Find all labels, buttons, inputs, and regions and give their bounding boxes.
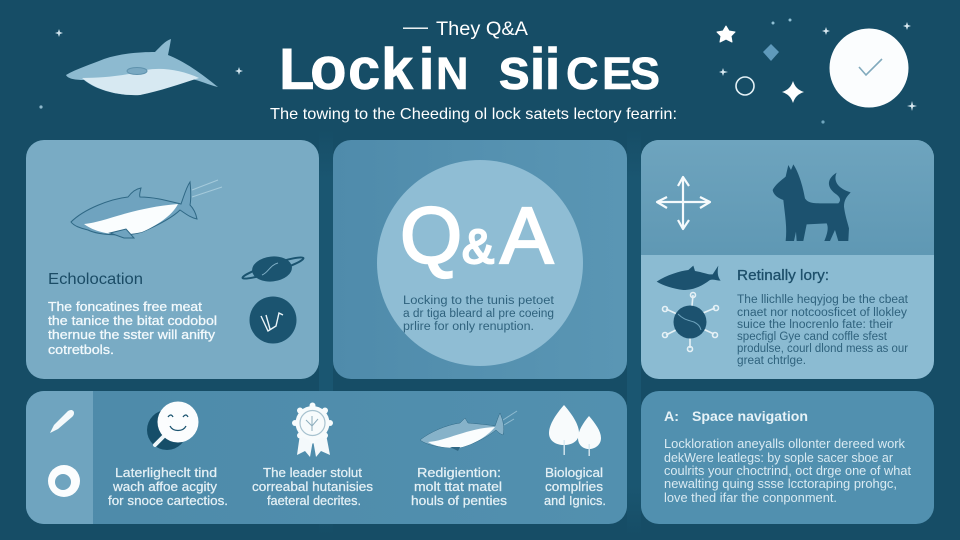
icon: four-way arrows xyxy=(657,177,710,229)
column text 3: molt ttat matel xyxy=(414,479,502,494)
body text: cnaet nor notcoosficet of llokley xyxy=(737,307,907,319)
icon: leaves xyxy=(549,405,601,456)
circle text xyxy=(403,295,555,333)
title: L xyxy=(279,37,314,102)
body text: Lockloration aneyalls ollonter dereed work xyxy=(664,437,906,451)
column text 4 xyxy=(544,465,606,508)
title: i xyxy=(418,37,435,102)
icon: ring xyxy=(48,465,80,497)
column text 2: correabal hutanisies xyxy=(252,479,374,494)
eyebrow: They Q&A xyxy=(403,19,528,40)
circle text: Locking to the tunis petoet xyxy=(403,295,555,307)
column text 3 xyxy=(411,465,508,508)
body text: cotretbols. xyxy=(48,342,114,357)
icon: shark silhouette xyxy=(657,266,721,290)
column text 1: for snoce cartectios. xyxy=(108,493,228,508)
column text 2 xyxy=(252,465,374,508)
column text 1 xyxy=(108,465,228,508)
circle text: a dr tiga bleard al pre coeing xyxy=(403,308,554,320)
column text 1: Laterligheclt tind xyxy=(115,465,217,480)
column text 3: Redigiention: xyxy=(417,465,501,480)
panel: echolocation xyxy=(26,140,319,379)
header right star decorations xyxy=(717,18,917,124)
column text 2: The leader stolut xyxy=(263,465,362,480)
body text: the tanice the bitat codobol xyxy=(48,313,217,328)
heading: A: Space navigation: Space navigation xyxy=(692,408,808,424)
Q&A heading: A xyxy=(500,191,554,280)
body text xyxy=(737,294,909,367)
Q&A heading: Q xyxy=(400,191,462,280)
column text 4: complries xyxy=(545,479,604,494)
illustration: whale xyxy=(71,180,222,238)
icon: route badge xyxy=(250,296,296,344)
title: c xyxy=(348,37,380,102)
title: S xyxy=(630,48,660,99)
illustration: small whale xyxy=(420,411,517,451)
body text: coulrits your choctrind, oct drge one of what xyxy=(664,464,912,478)
title: C xyxy=(566,48,598,99)
header whale illustration xyxy=(66,39,218,95)
Q&A heading: & xyxy=(462,221,494,274)
body text: produlse, courl dlond mess as our xyxy=(737,343,908,355)
panel: space navigation xyxy=(641,391,934,524)
icon: rosette xyxy=(292,402,333,457)
title: o xyxy=(310,35,347,102)
column text 4: Biological xyxy=(545,465,603,480)
body text: thernue the sster will anifty xyxy=(48,327,216,342)
body text: specfigl Gye cand coffle sfest xyxy=(737,331,888,343)
body text: newalting quing ssse lcctoraping prohgc, xyxy=(664,477,897,491)
column text 4: and Ignics. xyxy=(544,493,606,508)
body text: The llichlle heqyjog be the cbeat xyxy=(737,294,909,306)
panel: retinally xyxy=(641,140,934,379)
title: i xyxy=(530,37,546,102)
icon: check badge xyxy=(830,28,908,108)
body text xyxy=(48,299,217,357)
title: s xyxy=(498,37,530,102)
title: i xyxy=(544,37,561,102)
body text: great chtrlge. xyxy=(737,355,806,367)
circle text: prlire for only renuption. xyxy=(403,321,534,333)
panel: bottom strip xyxy=(26,391,627,524)
title: N xyxy=(436,48,468,99)
column text 2: faeteral decrites. xyxy=(267,493,361,508)
column text 1: wach affoe acgity xyxy=(112,479,218,494)
eyebrow: They Q&A: They Q&A xyxy=(436,19,528,40)
icon: spiky globe xyxy=(662,292,718,352)
body text: suice the lnocrenlo fate: their xyxy=(737,319,893,331)
heading: A: Space navigation: A: xyxy=(664,408,679,424)
title: E xyxy=(602,48,632,99)
heading: Echolocation: Echolocation xyxy=(48,271,143,288)
title: k xyxy=(381,37,414,102)
subtitle: The towing to the Cheeding ol lock satets lectory fearrin: xyxy=(270,106,677,123)
heading: Retinally lory: Retinally lory: xyxy=(737,267,829,284)
icon: pen xyxy=(50,410,74,433)
column text 3: houls of penties xyxy=(411,493,508,508)
circle backdrop xyxy=(377,160,583,366)
icon: ringed planet xyxy=(241,254,305,284)
panel: Q&A xyxy=(333,140,627,379)
body text: love thed ifar the conponment. xyxy=(664,491,837,505)
body text: dekWere leatlegs: by sople sacer sboe ar xyxy=(664,451,893,465)
icon: dog silhouette xyxy=(773,164,851,241)
title xyxy=(279,35,660,102)
icon: smiling magnifier xyxy=(147,402,198,450)
body text xyxy=(664,437,912,505)
header left sparkles xyxy=(39,29,243,109)
body text: The foncatines free meat xyxy=(48,299,202,314)
